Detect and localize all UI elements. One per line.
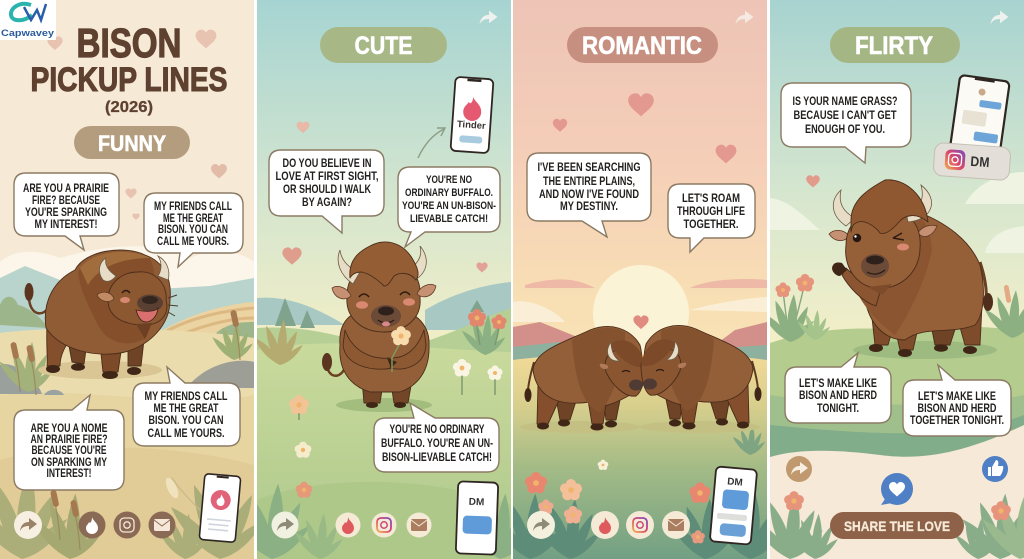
phone: tinder [450,77,494,153]
bubble: name grass: ENOUGH OF YOU. [805,124,885,136]
bubble: prairie fire: ARE YOU A PRAIRIE [23,183,109,195]
hearts [282,122,488,273]
phone: dm [710,466,757,545]
hearts [553,93,736,329]
bubble: roam through life: LET'S ROAM [682,193,740,205]
panel: romantic [489,0,786,559]
bubble: searching the plains: AND NOW I'VE FOUND [539,189,639,201]
bubble: roam through life: THROUGH LIFE [677,206,745,218]
phone: dm: DM [469,497,485,508]
logo: capwavey: Capwavey [1,28,55,39]
pill: romantic [567,27,718,63]
title [30,20,228,116]
title: (2026) [105,99,153,116]
bubble: love at first sight: BY AGAIN? [302,197,352,209]
bubble: great bison lower: CALL ME YOURS. [148,428,224,440]
icon: share [14,511,42,539]
bubble: searching the plains [527,153,651,237]
bubble: love at first sight: OR SHOULD I WALK [283,184,372,196]
panel: cute [225,0,536,559]
bubble: nome: BECAUSE YOU'RE [32,445,107,457]
pill: romantic: ROMANTIC [582,32,702,60]
bubble: name grass: IS YOUR NAME GRASS? [792,96,898,108]
bubble: love at first sight [269,150,384,233]
bubble: great bison: BISON. YOU CAN [158,224,228,236]
bubble: herd together tonight [903,365,1011,436]
hearts [47,30,227,220]
icon: share [736,11,753,24]
bubble: herd tonight: LET'S MAKE LIKE [799,378,877,390]
bubble: no ordinary buffalo [398,167,500,247]
bubble: herd together tonight: BISON AND HERD [918,403,996,415]
bubble: great bison: MY FRIENDS CALL [154,201,232,213]
bubble: prairie fire: MY INTEREST! [34,219,98,231]
bubble: nome: INTEREST! [46,468,92,480]
bubble: great bison lower: BISON. YOU CAN [148,415,224,427]
phone: dm [456,481,498,555]
bubble: name grass: BECAUSE I CAN'T GET [794,110,896,122]
bubble: great bison lower [133,367,240,446]
icon: share [786,456,812,482]
icon: mail [662,511,690,539]
bubble: no ordinary buffalo lower [374,403,499,472]
title: PICKUP LINES [30,61,228,99]
hearts [806,175,820,188]
bubble: no ordinary buffalo: YOU'RE NO [426,174,472,186]
pill: share the love [830,512,964,539]
icon: like [982,456,1008,482]
icon: tinder [336,512,360,538]
bubble: no ordinary buffalo lower: BISON-LIEVABLE CATCH! [382,452,492,464]
bubble: prairie fire [14,173,119,250]
bubble: nome: ARE YOU A NOME [30,423,108,435]
bubble: love at first sight: DO YOU BELIEVE IN [282,158,372,170]
bubble: prairie fire: YOU'RE SPARKING [25,207,107,219]
bubble: name grass [781,83,911,163]
phone: messages [950,75,1010,157]
bubble: no ordinary buffalo: LIEVABLE CATCH! [410,213,488,225]
phone: dm: DM [727,476,743,489]
bubble: prairie fire: FIRE? BECAUSE [32,195,100,207]
icon: share [272,512,298,538]
chip: instagram dm: DM [970,153,990,170]
bubble: herd tonight: BISON AND HERD [799,390,877,402]
bubble: searching the plains: MY DESTINY. [560,201,618,213]
bison: winking [829,180,997,359]
icon: share [527,511,555,539]
icon: share [991,11,1008,24]
bubble: nome [14,395,124,490]
bubble: great bison: ME THE GREAT [163,213,223,225]
bubble: no ordinary buffalo: YOU'RE AN UN-BISON- [402,200,496,212]
bubble: no ordinary buffalo lower: BUFFALO. YOU'RE AN UN- [381,438,493,450]
bubble: searching the plains: I'VE BEEN SEARCHING [538,162,641,174]
logo: capwavey [0,0,56,40]
phone: tinder [199,474,241,542]
bubble: great bison lower: ME THE GREAT [154,403,218,415]
pill: cute [320,27,447,63]
icon: mail [148,512,176,538]
icon: share [480,11,497,24]
icon: mail [406,512,432,538]
icon: tinder [78,512,106,538]
bison: holding flower [322,242,436,412]
title: BISON [76,20,182,66]
icon: heart bubble [881,473,913,505]
bubble: herd together tonight: LET'S MAKE LIKE [918,391,996,403]
bubble: love at first sight: LOVE AT FIRST SIGHT, [276,171,378,183]
chip: instagram dm [933,142,1011,181]
bubble: great bison lower: MY FRIENDS CALL [144,391,228,403]
pill: funny [74,126,190,159]
pill: share the love: SHARE THE LOVE [844,518,950,534]
bison: laughing [24,250,178,379]
bubble: nome: AN PRAIRIE FIRE? [30,434,108,446]
bubble: roam through life: TOGETHER. [684,219,738,231]
bubble: searching the plains: THE ENTIRE PLAINS, [543,176,635,188]
icon: instagram [372,512,396,538]
bubble: herd tonight: TONIGHT. [817,403,859,415]
bubble: no ordinary buffalo lower: YOU'RE NO ORDINARY [390,424,485,436]
icon: instagram [114,512,140,538]
icon: instagram [626,511,654,539]
bubble: great bison: CALL ME YOURS. [157,236,229,248]
pill: flirty: FLIRTY [855,32,933,60]
panel: funny [0,0,267,559]
pill: flirty [830,27,960,63]
bubble: great bison [144,193,243,267]
panel: flirty [749,0,1024,559]
bison pair: touching foreheads [520,325,762,433]
bubble: herd tonight [785,353,891,423]
pill: funny: FUNNY [98,131,166,156]
pill: cute: CUTE [354,32,412,60]
bubble: no ordinary buffalo: ORDINARY BUFFALO. [405,187,493,199]
bubble: nome: ON SPARKING MY [31,457,107,469]
arrow: to tinder phone [418,128,445,158]
phone: tinder: Tinder [456,119,486,132]
icon: tinder [591,511,619,539]
bubble: roam through life [668,184,755,252]
